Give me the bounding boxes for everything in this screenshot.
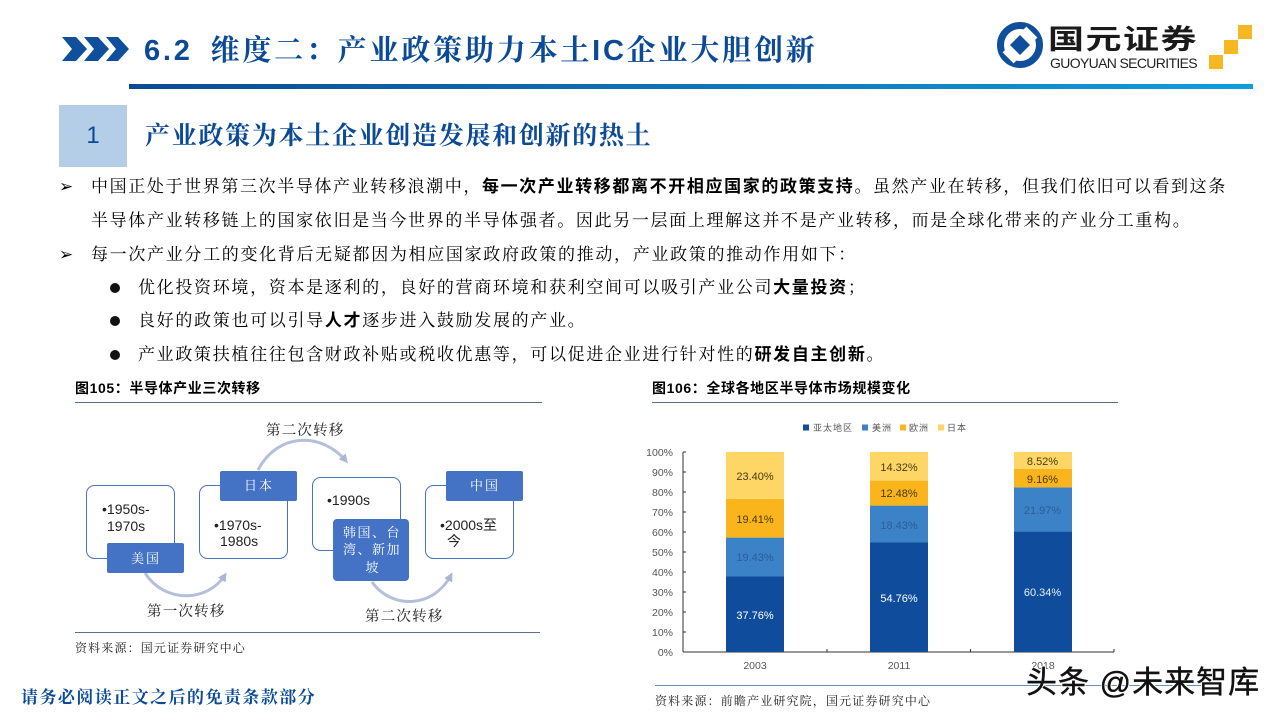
text block: bullets [59, 177, 1227, 364]
card: 1950s-1970s [86, 486, 174, 558]
icon: gold squares [1209, 25, 1252, 69]
logo [997, 22, 1252, 71]
flow diagram: three semiconductor transfers [86, 419, 523, 625]
label: first transfer: 第一次转移 [147, 600, 226, 621]
bar: 2011: 2011 [888, 660, 910, 672]
label: second transfer upper: 第二次转移 [266, 419, 344, 440]
stacked bar chart [646, 422, 1114, 672]
label: 日本 [220, 471, 297, 501]
section number box: 1 [86, 122, 100, 149]
bar: 2011: 12.48% [880, 488, 918, 500]
y axis: 50% [652, 547, 673, 559]
bar: 2003: 19.43% [736, 552, 774, 564]
header divider bar [129, 84, 1253, 89]
card: 1990s: •1990s [327, 492, 370, 508]
figure 105 heading: 图105：半导体产业三次转移 [75, 380, 261, 396]
card: 1970s-1980s [200, 486, 288, 558]
y axis: 90% [652, 467, 673, 479]
label: 中国 [446, 471, 523, 501]
bar: 2011: 54.76% [880, 593, 918, 605]
arrow: second transfer lower [372, 575, 451, 601]
logo name: 国元证券 [1048, 23, 1198, 55]
bar: 2003: 2003 [743, 660, 767, 672]
card: 2000s至今: 今 [447, 533, 461, 549]
y axis: 100% [646, 447, 673, 459]
source note left: 资料来源：国元证券研究中心 [75, 641, 246, 655]
watermark: 头条 @未来智库 [1026, 665, 1260, 700]
sub bullet one: 优化投资环境，资本是逐利的，良好的营商环境和获利空间可以吸引产业公司大量投资； [138, 278, 867, 297]
bar: 2018: 2018 [1031, 660, 1055, 672]
title: 6.2 维度二：产业政策助力本土IC企业大胆创新 [144, 35, 818, 67]
bullet one: ➢ [59, 177, 73, 197]
legend [803, 422, 967, 433]
bullet two: ➢ [59, 245, 73, 265]
y axis: 30% [652, 587, 673, 599]
card: 2000s至今 [426, 486, 514, 558]
bar: 2018: 60.34% [1024, 587, 1061, 599]
card: 1990s [312, 478, 400, 550]
y axis [646, 447, 1114, 659]
section heading: 产业政策为本土企业创造发展和创新的热土 [145, 123, 652, 150]
label: 韩国、台湾、新加坡: 韩国、台 [343, 522, 401, 541]
bar: 2018: 8.52% [1027, 456, 1058, 468]
card: 1970s-1980s: •1970s- [214, 517, 262, 533]
footer disclaimer: 请务必阅读正文之后的免责条款部分 [21, 688, 316, 707]
card: 1950s-1970s: 1970s [107, 518, 145, 534]
label: 美国 [107, 543, 184, 573]
y axis: 70% [652, 507, 673, 519]
sub bullet three: 产业政策扶植往往包含财政补贴或税收优惠等，可以促进企业进行针对性的研发自主创新。 [138, 345, 885, 364]
logo english name: GUOYUAN SECURITIES [1050, 55, 1197, 71]
bar: 2011: 14.32% [880, 462, 918, 474]
label: 韩国、台湾、新加坡 [333, 519, 409, 581]
label: 韩国、台湾、新加坡: 坡 [365, 557, 379, 576]
label: 美国: 美国 [131, 548, 161, 567]
bar: 2011 [870, 452, 928, 672]
bar: 2018 [1014, 452, 1072, 672]
sub bullet two: 良好的政策也可以引导人才逐步进入鼓励发展的产业。 [138, 311, 586, 330]
bar: 2018: 9.16% [1027, 474, 1058, 486]
bar: 2003 [726, 452, 784, 672]
bar: 2018: 21.97% [1024, 505, 1061, 517]
y axis: 60% [652, 527, 673, 539]
legend: 日本 [947, 422, 967, 433]
label: 韩国、台湾、新加坡: 湾、新加 [343, 539, 401, 558]
icon: logo emblem [997, 22, 1043, 68]
bar: 2003: 23.40% [736, 471, 774, 483]
source note right: 资料来源：前瞻产业研究院，国元证券研究中心 [655, 694, 931, 708]
section number box [59, 105, 127, 167]
icon: header chevrons [62, 37, 129, 61]
bullet one: 中国正处于世界第三次半导体产业转移浪潮中，每一次产业转移都离不开相应国家的政策支持。虽然产业在转移，但我们依旧可以看到这条 [91, 177, 1227, 196]
figure 106 heading: 图106：全球各地区半导体市场规模变化 [652, 380, 911, 396]
bullet one: 半导体产业转移链上的国家依旧是当今世界的半导体强者。因此另一层面上理解这并不是产业转移，而是全球化带来的产业分工重构。 [91, 211, 1191, 230]
y axis: 40% [652, 567, 673, 579]
legend: 欧洲 [909, 422, 929, 433]
y axis: 20% [652, 607, 673, 619]
y axis: 80% [652, 487, 673, 499]
bullet one [59, 177, 1227, 230]
arrow: second transfer upper [258, 440, 346, 470]
label: 日本: 日本 [244, 475, 274, 494]
bullet two: 每一次产业分工的变化背后无疑都因为相应国家政府政策的推动，产业政策的推动作用如下： [91, 245, 857, 264]
card: 1950s-1970s: •1950s- [102, 501, 150, 517]
bar: 2003: 19.41% [736, 514, 774, 526]
legend: 亚太地区 [813, 422, 853, 433]
bar: 2011: 18.43% [880, 520, 918, 532]
card: 1970s-1980s: 1980s [220, 533, 258, 549]
legend: 美洲 [872, 422, 892, 433]
y axis: 0% [658, 647, 673, 659]
card: 2000s至今: •2000s至 [440, 517, 497, 533]
arrow: first transfer [145, 573, 225, 596]
y axis: 10% [652, 627, 673, 639]
bar: 2003: 37.76% [736, 610, 774, 622]
label: 中国: 中国 [470, 475, 500, 494]
